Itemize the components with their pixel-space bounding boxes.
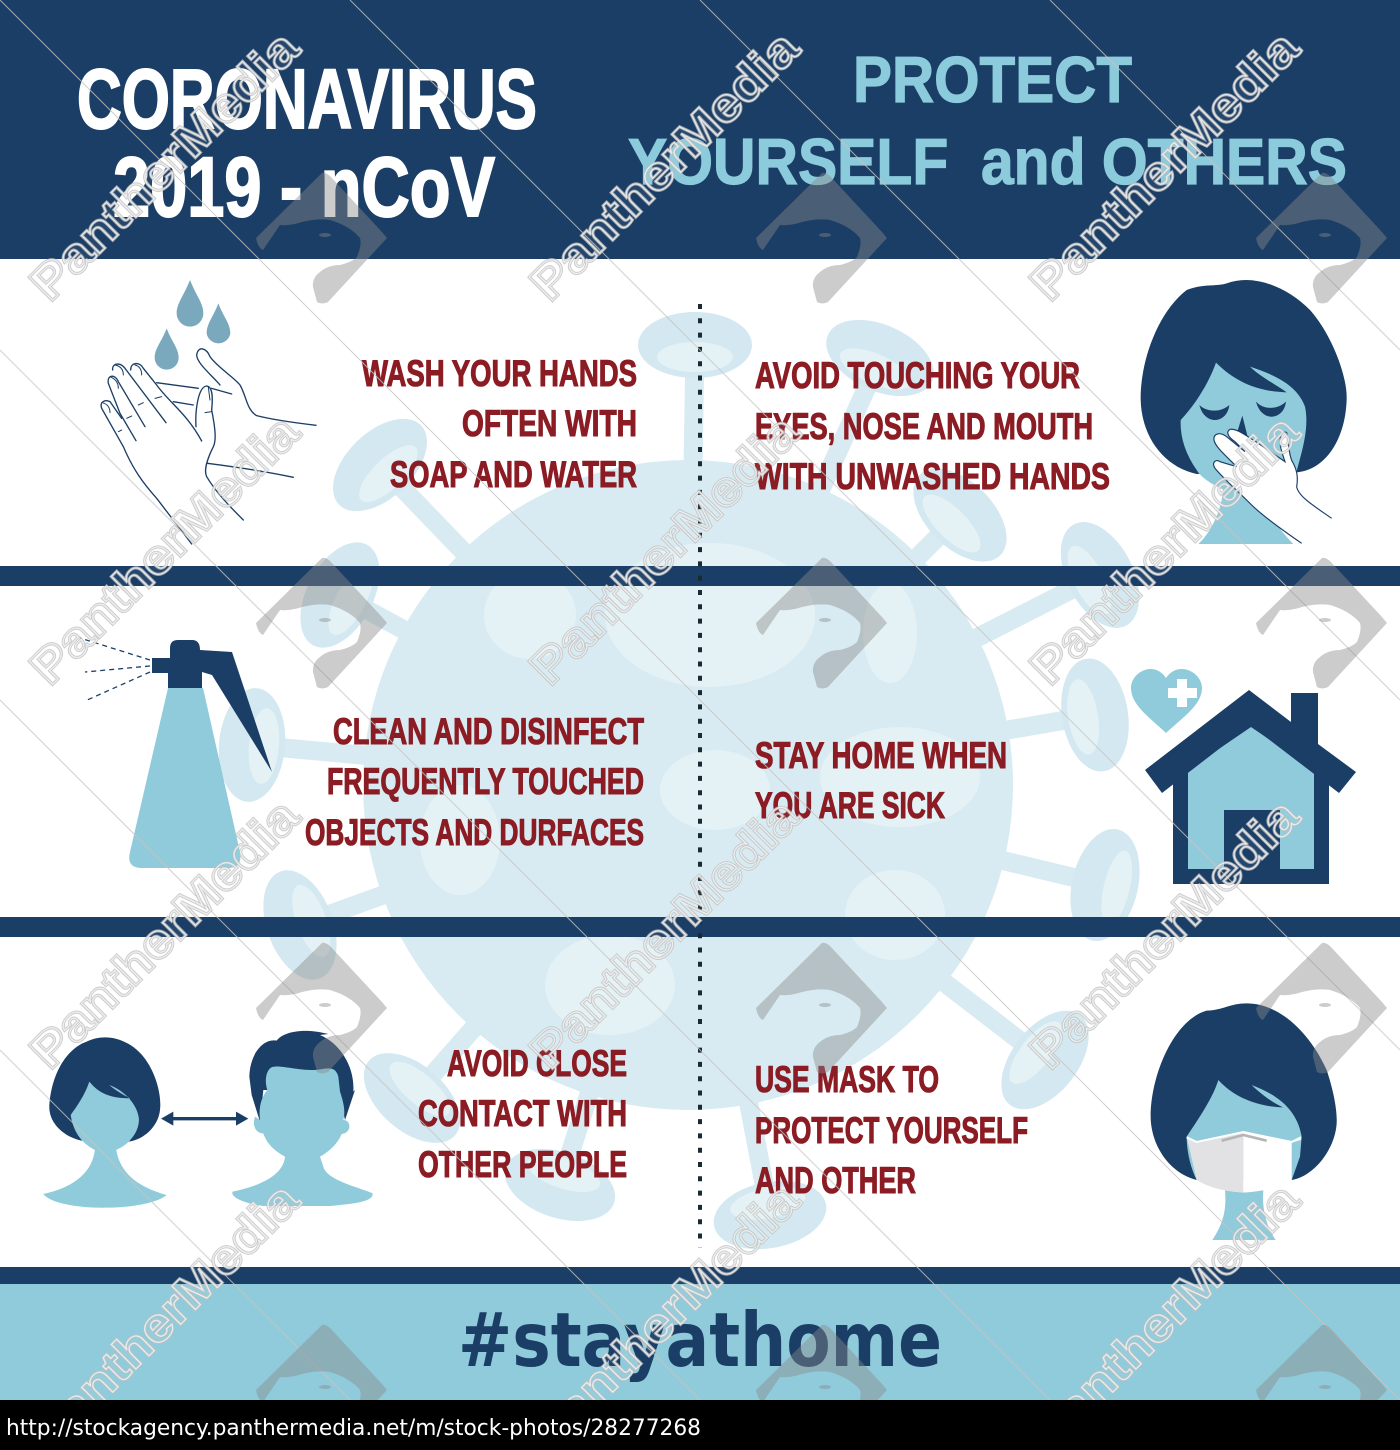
text: use mask: PROTECT YOURSELF xyxy=(755,1110,1028,1151)
text: clean and disinfect: OBJECTS AND DURFACES xyxy=(305,812,644,853)
text: wash your hands: OFTEN WITH xyxy=(462,403,637,444)
title: coronavirus xyxy=(77,52,537,234)
watermark pattern: PantherMedia xyxy=(520,789,810,1079)
text: wash your hands: SOAP AND WATER xyxy=(390,454,637,495)
watermark pattern: PantherMedia xyxy=(520,405,810,695)
divider bars xyxy=(0,566,1400,1284)
title: coronavirus: CORONAVIRUS xyxy=(77,52,537,146)
watermark pattern: PantherMedia xyxy=(20,789,310,1079)
watermark pattern: PantherMedia xyxy=(520,789,810,1079)
text: avoid touching: EYES, NOSE AND MOUTH xyxy=(755,406,1093,447)
text: avoid touching: AVOID TOUCHING YOUR xyxy=(755,355,1080,396)
text: avoid close contact: AVOID CLOSE xyxy=(447,1043,627,1084)
text: use mask xyxy=(755,1059,1028,1201)
watermark pattern: PantherMedia xyxy=(520,21,810,311)
icon: woman touching face xyxy=(1141,280,1347,544)
watermark pattern: PantherMedia xyxy=(20,405,310,695)
watermark pattern: PantherMedia xyxy=(20,21,310,311)
text: clean and disinfect xyxy=(305,711,644,853)
watermark pattern: PantherMedia xyxy=(1020,21,1310,311)
text: stay home: YOU ARE SICK xyxy=(755,785,945,826)
icon: two people keeping distance xyxy=(43,1031,373,1208)
text: use mask: AND OTHER xyxy=(755,1160,916,1201)
text: avoid close contact xyxy=(418,1043,627,1185)
watermark pattern: PantherMedia xyxy=(20,405,310,695)
text: clean and disinfect: CLEAN AND DISINFECT xyxy=(333,711,644,752)
watermark pattern: PantherMedia xyxy=(20,789,310,1079)
hashtag text: #stayathome xyxy=(458,1296,942,1384)
icon: spray bottle xyxy=(80,638,272,868)
text: stay home: STAY HOME WHEN xyxy=(755,735,1007,776)
text: wash your hands xyxy=(362,353,637,495)
virus illustration xyxy=(214,305,1155,1258)
header band xyxy=(0,0,1400,259)
text: avoid touching xyxy=(755,355,1110,497)
text: avoid close contact: OTHER PEOPLE xyxy=(418,1144,627,1185)
watermark pattern: PantherMedia xyxy=(1020,789,1310,1079)
watermark pattern: PantherMedia xyxy=(520,21,810,311)
title: protect yourself and others xyxy=(628,43,1347,198)
text: stay home xyxy=(755,735,1007,826)
title: protect yourself and others: PROTECT xyxy=(853,43,1132,116)
watermark pattern: PantherMedia xyxy=(520,405,810,695)
text: clean and disinfect: FREQUENTLY TOUCHED xyxy=(327,761,644,802)
icon: washing hands with water drops xyxy=(101,280,316,544)
watermark pattern: PantherMedia xyxy=(1020,405,1310,695)
text: wash your hands: WASH YOUR HANDS xyxy=(362,353,637,394)
vertical dotted divider xyxy=(698,304,702,1248)
source url: http://stockagency.panthermedia.net/m/stock-photos/28277268 xyxy=(6,1416,701,1441)
text: avoid close contact: CONTACT WITH xyxy=(418,1093,627,1134)
text: avoid touching: WITH UNWASHED HANDS xyxy=(755,456,1110,497)
watermark pattern: PantherMedia xyxy=(1020,789,1310,1079)
title: coronavirus: 2019 - nCoV xyxy=(113,140,495,234)
text: use mask: USE MASK TO xyxy=(755,1059,939,1100)
watermark pattern: PantherMedia xyxy=(20,21,310,311)
icon: woman wearing mask xyxy=(1151,1003,1337,1240)
icon: house with heart xyxy=(1131,669,1356,884)
watermark pattern: PantherMedia xyxy=(1020,405,1310,695)
watermark pattern: PantherMedia xyxy=(1020,21,1310,311)
title: protect yourself and others: YOURSELF and OTHERS xyxy=(628,125,1347,198)
source footer band xyxy=(0,1400,1400,1450)
hashtag band xyxy=(0,1284,1400,1400)
